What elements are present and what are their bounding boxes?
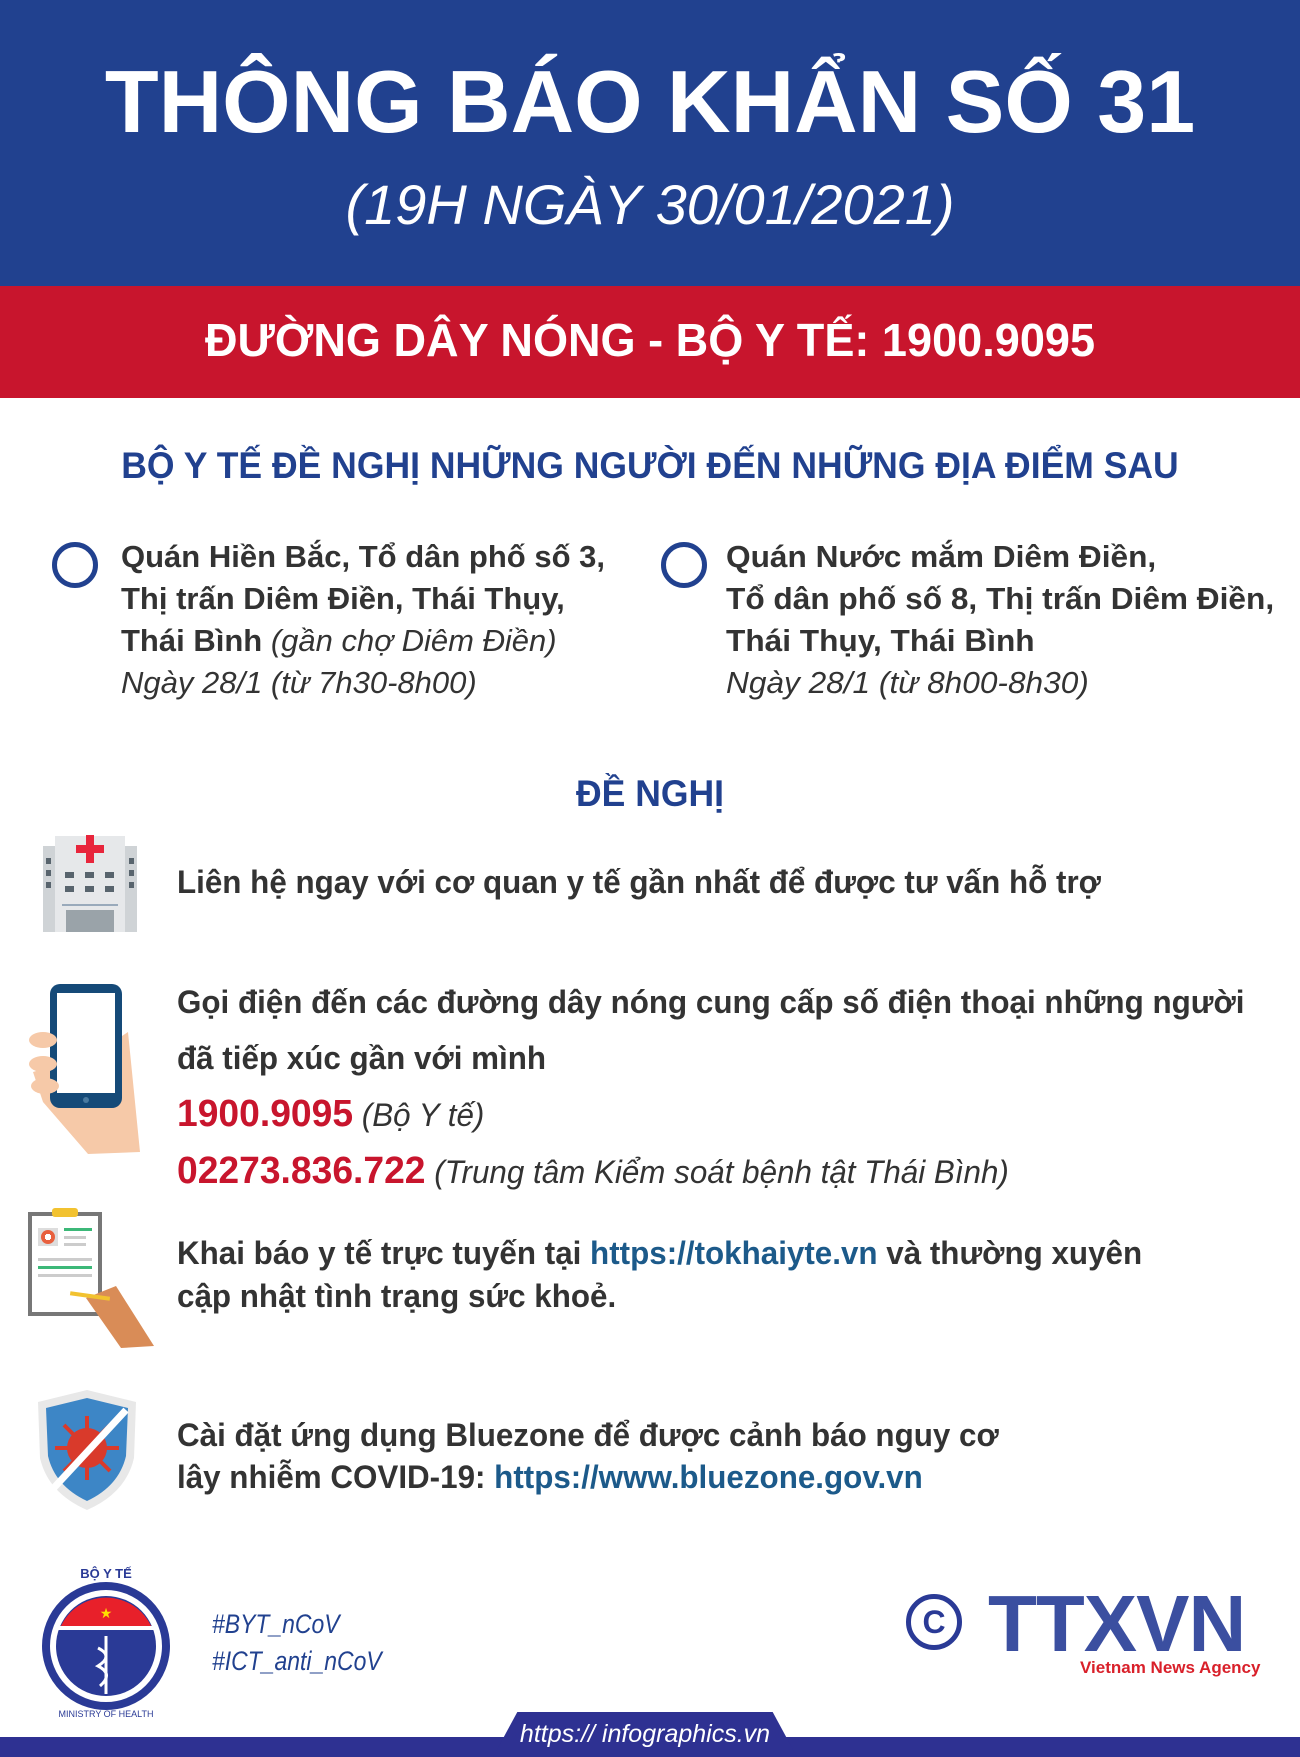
location 1: Ngày 28/1 (từ 7h30-8h00) [121, 665, 477, 700]
item 3: online health declaration: Khai báo y tế trực tuyến tại https://tokhaiyte.vn và thường xuyên [177, 1235, 1142, 1271]
item 1: contact health facility: Liên hệ ngay với cơ quan y tế gần nhất để được tư vấn hỗ trợ [177, 864, 1101, 900]
subtitle date: (19H NGÀY 30/01/2021) [345, 173, 955, 236]
location 1: Thái Bình (gần chợ Diêm Điền) [121, 623, 557, 658]
item 2: hotlines: 02273.836.722 (Trung tâm Kiểm soát bệnh tật Thái Bình) [177, 1150, 1009, 1192]
item 4: Bluezone app: lây nhiễm COVID-19: https://www.bluezone.gov.vn [177, 1459, 923, 1495]
hashtags [212, 1609, 384, 1676]
item 1: contact health facility [43, 835, 1101, 932]
location 2 [661, 539, 1274, 700]
icon: circle bullet [52, 542, 98, 588]
item 4: Bluezone app [38, 1390, 999, 1510]
location 2: Tổ dân phố số 8, Thị trấn Diêm Điền, [726, 581, 1274, 616]
icon: phone in hand [29, 984, 140, 1154]
logo: Ministry of Health: BỘ Y TẾ [80, 1566, 132, 1581]
section heading: locations: BỘ Y TẾ ĐỀ NGHỊ NHỮNG NGƯỜI ĐẾN NHỮNG ĐỊA ĐIỂM SAU [121, 445, 1179, 486]
item 2: hotlines: 1900.9095 (Bộ Y tế) [177, 1093, 484, 1135]
footer bar [0, 1737, 1300, 1757]
location 2: Ngày 28/1 (từ 8h00-8h30) [726, 665, 1089, 700]
item 2: hotlines: Gọi điện đến các đường dây nóng cung cấp số điện thoại những người [177, 984, 1244, 1020]
location 1 [52, 539, 605, 700]
section heading: recommendations: ĐỀ NGHỊ [576, 773, 724, 814]
item 3: online health declaration [28, 1208, 1142, 1348]
hotline band [0, 286, 1300, 398]
icon: copyright [906, 1594, 962, 1650]
item 2: hotlines [29, 984, 1244, 1192]
location 1: Thị trấn Diêm Điền, Thái Thụy, [121, 581, 565, 616]
logo: TTXVN copyright: Vietnam News Agency [1080, 1658, 1260, 1677]
icon: shield with virus [38, 1390, 136, 1510]
hashtags: #ICT_anti_nCoV [212, 1646, 382, 1676]
hotline text: ĐƯỜNG DÂY NÓNG - BỘ Y TẾ: 1900.9095 [205, 314, 1095, 366]
logo: Ministry of Health [42, 1566, 170, 1718]
logo: TTXVN copyright [906, 1579, 1260, 1677]
icon: circle bullet [661, 542, 707, 588]
item 2: hotlines: đã tiếp xúc gần với mình [177, 1040, 546, 1076]
icon: clipboard [28, 1208, 154, 1348]
footer url tab: https:// infographics.vn [520, 1720, 770, 1748]
location 2: Thái Thụy, Thái Bình [726, 623, 1035, 658]
location 2: Quán Nước mắm Diêm Điền, [726, 539, 1156, 574]
footer url tab [504, 1712, 786, 1747]
logo: Ministry of Health: ★ [100, 1605, 112, 1621]
TTXVN wordmark: TTXVN [988, 1579, 1245, 1668]
item 4: Bluezone app: Cài đặt ứng dụng Bluezone để được cảnh báo nguy cơ [177, 1417, 999, 1453]
item 3: online health declaration: cập nhật tình trạng sức khoẻ. [177, 1278, 616, 1314]
location 1: Quán Hiền Bắc, Tổ dân phố số 3, [121, 539, 605, 574]
hashtags: #BYT_nCoV [212, 1609, 340, 1639]
icon: hospital [43, 835, 137, 932]
header band [0, 0, 1300, 286]
icon: copyright: C [922, 1604, 946, 1640]
title: THÔNG BÁO KHẨN SỐ 31 [105, 52, 1195, 151]
